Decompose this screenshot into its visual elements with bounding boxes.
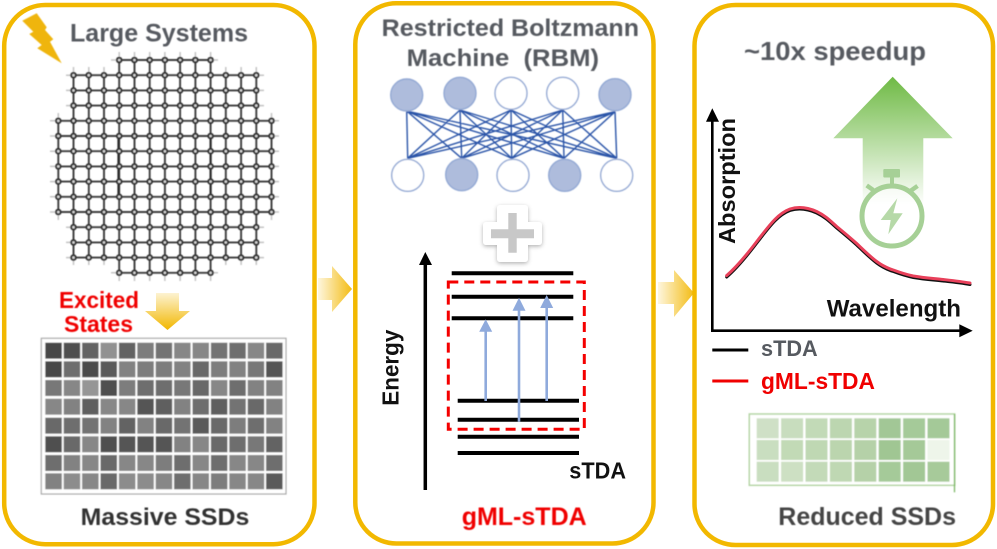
arrow: down to SSD grid [145,293,190,330]
legend: gML-sTDA [761,368,875,394]
arrow: panel 1 to panel 2 [318,266,352,312]
panel: large systems [4,5,314,544]
dashed selection box [448,282,584,429]
heading: ~10x speedup: ~10x speedup [744,36,926,66]
energy levels [452,273,579,453]
diagram: RBM network [391,77,633,191]
panel: speedup results [694,5,993,545]
grid: massive SSDs [41,338,286,494]
label: Wavelength: Wavelength [827,296,961,323]
arrow: wavelength axis [711,324,973,337]
caption: Reduced SSDs: Reduced SSDs [778,503,956,531]
heading: Restricted Boltzmann Machine: Machine (RBM) [407,45,599,72]
icon: lightning bolt [22,13,62,63]
caption: gML-sTDA: gML-sTDA [462,503,587,531]
icon: plus sign [483,205,542,262]
label: Excited States [59,287,139,337]
heading: Restricted Boltzmann Machine: Restricted Boltzmann [382,15,639,42]
label: sTDA: sTDA [569,457,626,483]
legend [712,336,875,394]
label: Excited States: States [64,311,133,337]
caption: Massive SSDs: Massive SSDs [81,504,249,531]
panel: RBM plus sTDA [355,3,654,544]
RBM connections [407,110,617,158]
curve: gML-sTDA [727,208,970,283]
icon: stopwatch [862,169,922,246]
legend: sTDA [761,336,818,361]
transition arrows [479,295,553,422]
chart: energy level diagram [377,252,626,490]
heading: Large Systems: Large Systems [70,20,248,48]
curve: sTDA [727,209,970,284]
heading: Restricted Boltzmann Machine [382,15,639,72]
label: Excited States: Excited [59,287,139,313]
arrow: green speedup [833,77,953,205]
grid: reduced SSDs [749,414,955,492]
diagram: molecular lattice [50,52,279,281]
chart: absorption spectrum [706,108,973,337]
arrow: absorption axis [706,108,719,332]
arrow: panel 2 to panel 3 [658,270,694,317]
label: Energy: Energy [377,330,403,406]
label: Absorption: Absorption [714,118,740,244]
RBM nodes [391,77,633,191]
arrow: energy axis [419,252,432,490]
